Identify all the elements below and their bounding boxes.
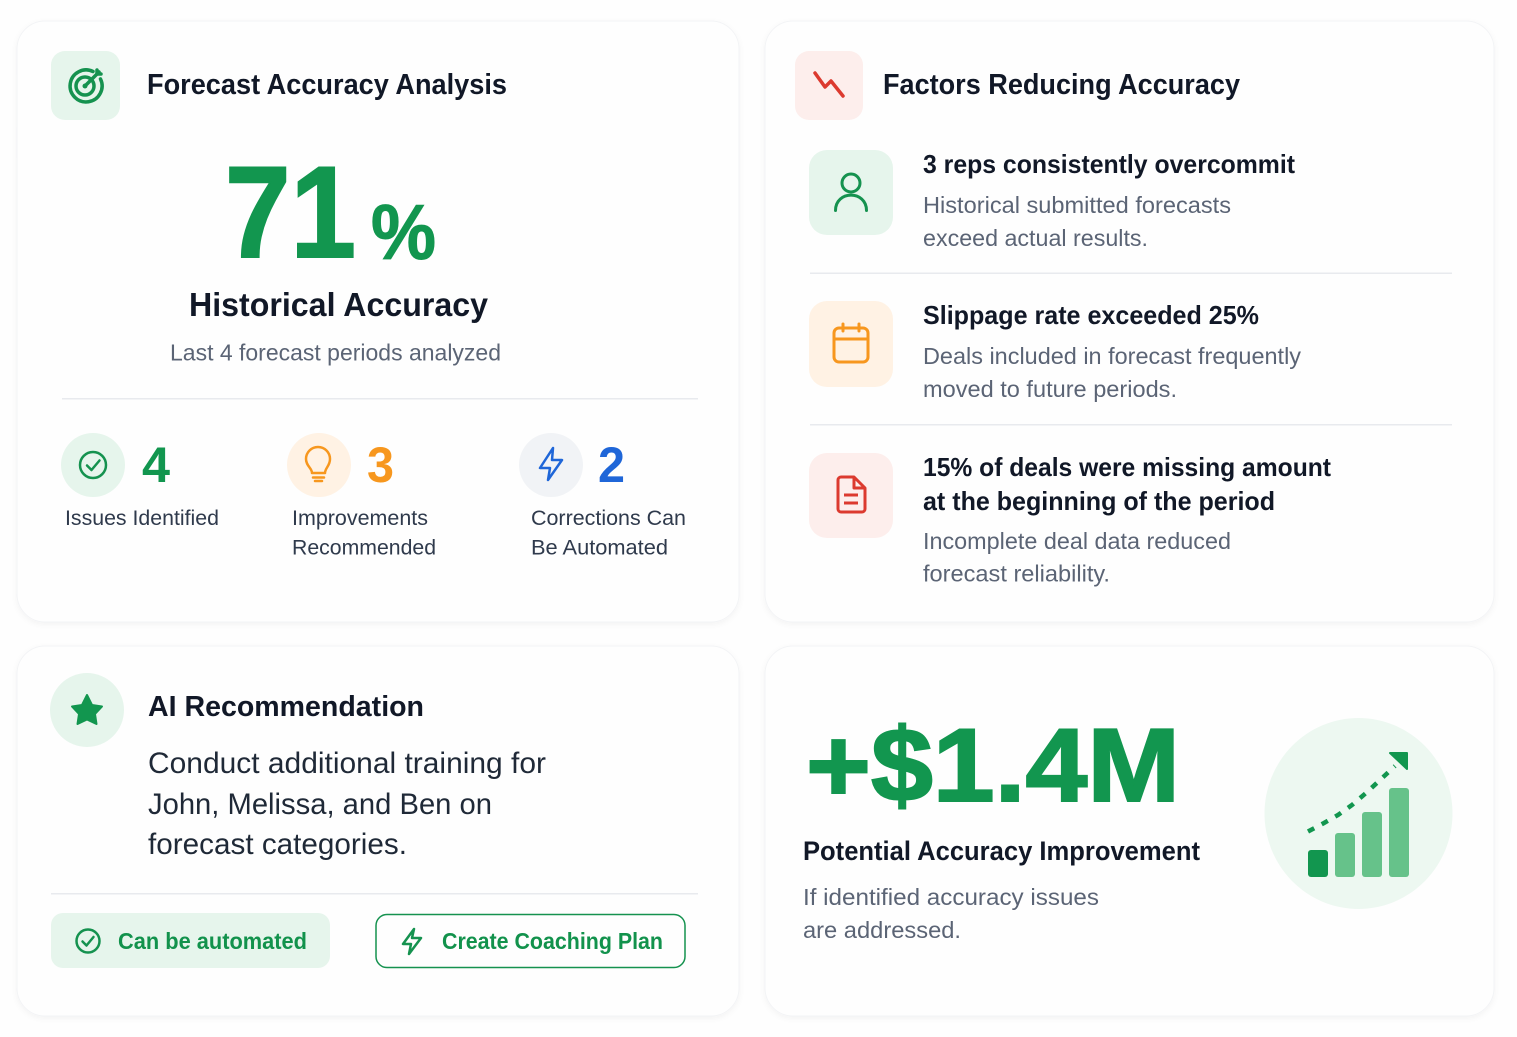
text: improvement note [803, 884, 1099, 943]
chart: rising bars with arrow [1264, 718, 1452, 909]
heading: forecast accuracy analysis: Forecast Accuracy Analysis [147, 69, 507, 101]
stat: issues identified: Issues Identified [65, 507, 219, 530]
stat: corrections can be automated: Be Automated [531, 536, 668, 560]
text: last 4 forecast periods: Last 4 forecast periods analyzed [170, 340, 501, 366]
metric: 71 percent: % [371, 188, 436, 276]
metric: 71 percent: 71 [225, 139, 356, 285]
stat: improvements recommended: 3 [367, 437, 394, 493]
text: recommendation body: forecast categories. [148, 828, 407, 861]
panel: factors reducing accuracy [765, 21, 1494, 622]
factor: reps overcommit: 3 reps consistently overcommit [923, 149, 1295, 179]
text: recommendation body: John, Melissa, and Ben on [148, 788, 492, 821]
button: create coaching plan [376, 914, 685, 968]
badge: can be automated [51, 913, 330, 968]
text: improvement note: If identified accuracy issues [803, 884, 1099, 910]
text: recommendation body [148, 747, 546, 861]
factor: reps overcommit: exceed actual results. [923, 225, 1148, 251]
stat: corrections can be automated: Corrections Can [531, 507, 686, 530]
icon: target [51, 51, 120, 120]
stat: corrections can be automated [519, 433, 686, 560]
factor: missing deal amounts: 15% of deals were missing amount [923, 452, 1331, 482]
text: recommendation body: Conduct additional training for [148, 747, 546, 780]
factor: slippage rate: Deals included in forecast frequently [923, 343, 1302, 369]
factor: reps overcommit [809, 149, 1295, 251]
stat: improvements recommended [287, 433, 436, 560]
label: historical accuracy: Historical Accuracy [189, 286, 489, 323]
factor: missing deal amounts: at the beginning of the period [923, 486, 1275, 516]
heading: factors reducing accuracy: Factors Reducing Accuracy [883, 69, 1240, 101]
button: create coaching plan: Create Coaching Plan [442, 928, 663, 954]
badge: can be automated: Can be automated [118, 928, 307, 954]
metric: plus 1.4M: +$1.4M [806, 708, 1180, 824]
factor: missing deal amounts [809, 452, 1331, 586]
metric: 71 percent [225, 139, 436, 285]
factor: missing deal amounts: Incomplete deal data reduced [923, 528, 1231, 554]
icon: star [50, 673, 124, 747]
heading: ai recommendation: AI Recommendation [148, 691, 424, 723]
stat: issues identified [61, 433, 219, 530]
stat: improvements recommended: Recommended [292, 536, 436, 560]
factor: slippage rate: Slippage rate exceeded 25% [923, 300, 1259, 330]
panel: forecast accuracy analysis [17, 21, 739, 622]
label: potential accuracy improvement: Potential Accuracy Improvement [803, 836, 1200, 866]
factor: reps overcommit: Historical submitted forecasts [923, 192, 1231, 218]
factor: slippage rate [809, 300, 1302, 402]
stat: improvements recommended: Improvements [292, 507, 428, 530]
panel: ai recommendation [17, 646, 739, 1016]
factor: missing deal amounts: forecast reliability. [923, 560, 1110, 586]
factor: slippage rate: moved to future periods. [923, 376, 1177, 402]
stat: corrections can be automated: 2 [598, 437, 625, 493]
text: improvement note: are addressed. [803, 917, 961, 943]
stat: issues identified: 4 [142, 437, 170, 493]
icon: trend down [795, 51, 863, 120]
panel: potential improvement [765, 646, 1494, 1016]
